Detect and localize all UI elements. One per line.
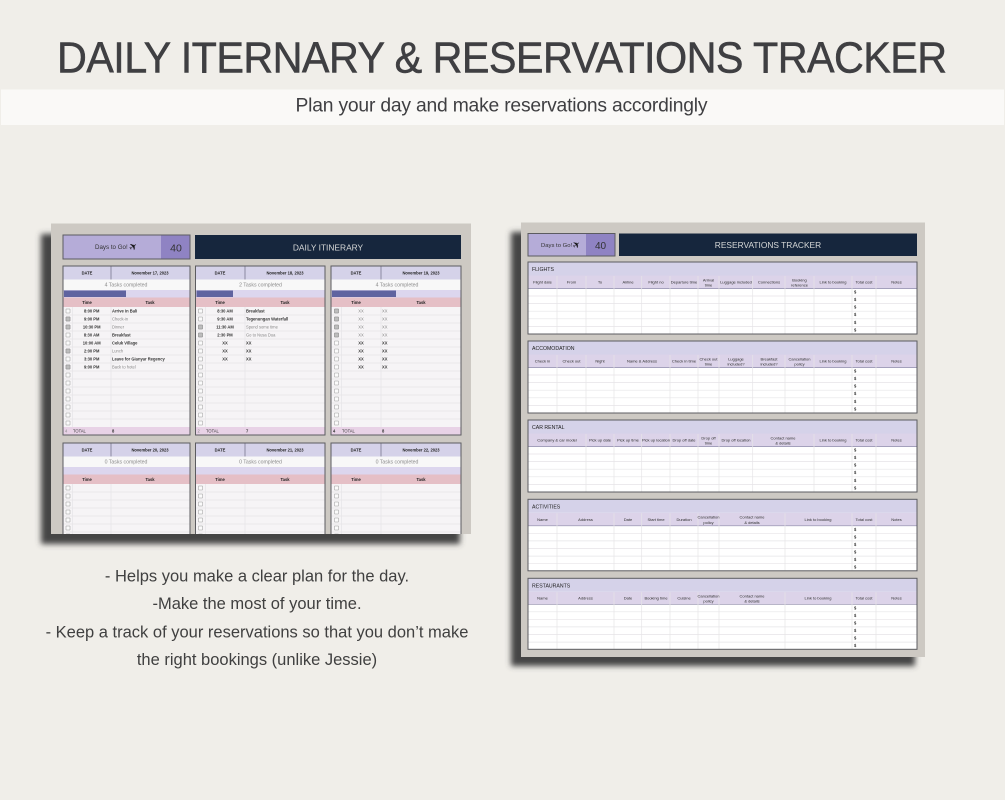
section: flights: $ <box>854 305 857 310</box>
section: flights <box>528 262 917 334</box>
section: accomodation: Total cost <box>856 358 873 364</box>
section: accomodation: Link to booking <box>820 358 846 364</box>
card: November 17: DATE <box>82 270 93 276</box>
section: car rental: Drop off date <box>672 438 696 442</box>
card: November 18: 7 <box>246 428 249 434</box>
section: restaurants <box>528 578 917 649</box>
section: car rental: Pick up location <box>642 438 670 442</box>
card: November 17: November 17, 2023 <box>131 270 169 276</box>
panel: reservations tracker sheet <box>511 222 925 666</box>
section: activities: Link to booking <box>805 517 831 522</box>
section: activities: Notes <box>891 517 902 522</box>
section: accomodation: included? <box>727 362 745 366</box>
section: car rental: Drop off <box>701 435 716 440</box>
card: November 22: November 22, 2023 <box>402 448 440 452</box>
subtitle band <box>1 90 1004 125</box>
section: accomodation: Notes <box>891 358 902 364</box>
section: activities: $ <box>854 534 857 539</box>
section: car rental: Notes <box>891 438 902 442</box>
section: flights: Notes <box>891 280 902 284</box>
card: November 17: 2:00 PM <box>84 348 100 353</box>
card: November 17: Lunch <box>112 348 124 353</box>
card: November 19: XX <box>358 356 364 361</box>
section: flights: From <box>567 280 577 284</box>
section: accomodation: Luggage <box>728 356 745 361</box>
card: November 22 <box>331 443 461 543</box>
subtitle band: Plan your day and make reservations accordingly <box>296 96 708 116</box>
card: November 18: 2 <box>198 428 200 434</box>
section: car rental: Drop off location <box>721 438 751 442</box>
section: activities: Name <box>537 517 549 522</box>
card: November 21: Task <box>280 477 290 482</box>
section: accomodation: $ <box>854 406 857 411</box>
section: flights: Link to booking <box>820 280 846 284</box>
card: November 18: DATE <box>215 270 226 276</box>
section: accomodation: Name & Address <box>627 358 657 364</box>
section: flights: $ <box>854 320 857 325</box>
card: November 19: XX <box>382 364 388 369</box>
section: accomodation: Check in <box>535 358 550 364</box>
section: flights: $ <box>854 327 857 332</box>
section: car rental: Total cost <box>856 438 873 442</box>
card: November 18: XX <box>222 340 228 345</box>
days to go box: 40 <box>170 242 182 254</box>
text block: benefits: - Helps you make a clear plan for the day. <box>105 568 409 586</box>
section: activities: Date <box>624 517 633 522</box>
section: activities: policy <box>703 520 714 525</box>
card: November 19: Task <box>416 300 426 305</box>
section: flights: $ <box>854 290 857 294</box>
section: restaurants: & details <box>744 598 760 603</box>
section: activities: Start time <box>647 517 665 522</box>
daily itinerary heading <box>195 235 461 259</box>
card: November 21: Time <box>215 477 225 482</box>
section: accomodation: time <box>705 362 713 366</box>
section: car rental: Link to booking <box>820 438 846 442</box>
card: November 18: XX <box>246 340 252 345</box>
section: accomodation: Cancellation <box>788 356 811 361</box>
card: November 17: Arrive in Bali <box>112 308 137 313</box>
section: activities: $ <box>854 542 857 547</box>
card: November 20: DATE <box>82 448 93 452</box>
card: November 18: 2:30 PM <box>217 332 233 337</box>
card: November 17: TOTAL <box>73 428 87 434</box>
card: November 21: DATE <box>215 448 226 452</box>
days to go box <box>63 235 190 259</box>
card: November 22: DATE <box>351 448 362 452</box>
section: car rental: $ <box>854 448 857 452</box>
title: DAILY ITERNARY & RESERVATIONS TRACKER <box>57 33 947 83</box>
card: November 18: Task <box>280 300 290 305</box>
card: November 18: XX <box>246 356 252 361</box>
section: flights: $ <box>854 312 857 317</box>
card: November 19: XX <box>382 332 388 337</box>
section: activities: Cancellation <box>697 515 720 520</box>
days to go box: 40 <box>595 241 606 252</box>
card: November 20 <box>63 443 190 543</box>
card: November 19: 4 Tasks completed <box>376 282 419 288</box>
section: restaurants: $ <box>854 605 857 610</box>
card: November 17: Check-in <box>112 316 129 321</box>
card: November 19: XX <box>382 340 388 345</box>
section: car rental: Contact name <box>771 435 796 440</box>
days to go box <box>528 234 615 256</box>
card: November 18: Breakfast <box>246 308 265 313</box>
section: activities: & details <box>744 520 760 525</box>
card: November 18 <box>196 266 325 435</box>
text block: benefits: -Make the most of your time. <box>152 595 362 613</box>
sheet contents <box>521 222 925 657</box>
section: accomodation: included? <box>760 362 778 366</box>
sheet contents <box>51 224 471 543</box>
section: accomodation: $ <box>854 368 857 374</box>
section: car rental: $ <box>854 470 857 475</box>
card: November 18: XX <box>222 348 228 353</box>
card: November 19: November 19, 2023 <box>402 270 440 276</box>
reservations tracker heading <box>619 234 917 256</box>
section: accomodation: Check in time <box>672 358 697 364</box>
card: November 17: Dinner <box>112 324 125 329</box>
card: November 18: November 18, 2023 <box>266 270 304 276</box>
section: restaurants: policy <box>703 598 714 603</box>
section: flights: reference <box>791 282 809 288</box>
section: car rental: $ <box>854 463 857 468</box>
section: flights: Flight no <box>648 280 664 284</box>
section: activities: Contact name <box>740 515 765 520</box>
card: November 19: XX <box>358 316 364 321</box>
section: activities: Address <box>578 517 593 522</box>
card: November 19: DATE <box>351 270 362 276</box>
card: November 17: 10:00 AM <box>83 340 101 345</box>
card: November 22: 0 Tasks completed <box>376 460 419 466</box>
section: flights: Booking <box>792 277 807 282</box>
card: November 17: 9:00 PM <box>84 316 100 321</box>
section: restaurants: Cancellation <box>697 593 720 598</box>
card: November 18: Tegenungan Waterfall <box>246 316 288 321</box>
section: restaurants: Total cost <box>856 595 873 600</box>
section: accomodation: $ <box>854 391 857 396</box>
section: restaurants: $ <box>854 643 857 648</box>
card: November 19: XX <box>358 324 364 329</box>
sheet shadow <box>41 234 460 544</box>
card: November 18: XX <box>246 348 252 353</box>
card: November 18: 8:30 AM <box>217 308 233 313</box>
section: activities: $ <box>854 565 857 570</box>
section: restaurants: Address <box>578 595 593 600</box>
section: flights: Arrival <box>703 277 714 282</box>
card: November 17: Breakfast <box>112 332 131 337</box>
section: car rental: time <box>705 440 713 446</box>
section: restaurants: $ <box>854 628 857 633</box>
card: November 20: Task <box>145 477 155 482</box>
card: November 19: XX <box>358 340 364 345</box>
section: activities: $ <box>854 549 857 554</box>
section: restaurants: Contact name <box>740 593 765 598</box>
card: November 22: Task <box>416 477 426 482</box>
section: accomodation: ACCOMODATION <box>532 346 575 352</box>
days to go box: ✈ <box>570 239 583 252</box>
card: November 21 <box>196 443 325 543</box>
section: flights: Departure time <box>671 280 698 284</box>
card: November 19: XX <box>382 308 388 313</box>
card: November 18: 9:30 AM <box>217 316 233 321</box>
card: November 19: XX <box>358 308 364 313</box>
days to go box: Days to Go! <box>95 244 128 251</box>
card: November 17: Task <box>145 300 155 305</box>
section: accomodation: $ <box>854 376 857 381</box>
card: November 19: 8 <box>382 428 385 434</box>
text block: benefits <box>46 568 468 669</box>
section: activities <box>528 499 917 571</box>
section: restaurants: $ <box>854 613 857 618</box>
section: car rental: $ <box>854 478 857 483</box>
section: activities: Duration <box>676 517 692 522</box>
card: November 18: XX <box>222 356 228 361</box>
card: November 19: XX <box>382 316 388 321</box>
card: November 17: 8:00 PM <box>84 308 100 313</box>
section: accomodation: Night <box>595 358 606 364</box>
section: restaurants: Notes <box>891 595 902 600</box>
card: November 19: 4 <box>333 428 336 434</box>
text block: benefits: the right bookings (unlike Jessie) <box>137 651 377 669</box>
section: activities: Total cost <box>856 517 873 522</box>
card: November 17: Back to hotel <box>112 364 136 369</box>
card: November 17: Celuk Village <box>112 340 138 345</box>
card: November 18: Time <box>215 300 225 305</box>
card: November 19: XX <box>382 356 388 361</box>
section: accomodation: Check out <box>562 358 581 364</box>
card: November 18: 2 Tasks completed <box>239 282 282 288</box>
section: activities: $ <box>854 527 857 532</box>
section: car rental: Pick up time <box>617 438 640 442</box>
panel: daily itinerary sheet <box>41 224 471 544</box>
card: November 19: XX <box>358 348 364 353</box>
card: November 19 <box>331 266 461 435</box>
section: accomodation: $ <box>854 399 857 404</box>
card: November 17: 8 <box>112 428 115 434</box>
card: November 20: November 20, 2023 <box>131 448 169 452</box>
section: car rental: Company & car model <box>537 438 577 442</box>
section: restaurants: RESTAURANTS <box>532 583 571 589</box>
card: November 19: Time <box>351 300 361 305</box>
card: November 18: TOTAL <box>206 428 220 434</box>
card: November 17: 8:30 AM <box>84 332 100 337</box>
section: accomodation <box>528 341 917 413</box>
section: accomodation: Check out <box>699 356 718 361</box>
card: November 17: 4 <box>65 428 68 434</box>
card: November 19: XX <box>358 332 364 337</box>
section: flights: time <box>705 282 713 288</box>
card: November 17: 3:30 PM <box>84 356 100 361</box>
section: car rental: $ <box>854 485 857 490</box>
section: restaurants: Link to booking <box>805 595 831 600</box>
card: November 19: XX <box>382 324 388 329</box>
card: November 17: 4 Tasks completed <box>105 282 148 288</box>
card: November 19: TOTAL <box>342 428 356 434</box>
card: November 18: Spend some time <box>246 324 279 329</box>
section: restaurants: $ <box>854 620 857 625</box>
section: car rental: & details <box>775 440 791 446</box>
card: November 21: 0 Tasks completed <box>239 460 282 466</box>
section: restaurants: Cuisine <box>677 595 691 600</box>
reservations tracker heading: RESERVATIONS TRACKER <box>715 240 821 250</box>
card: November 19: XX <box>382 348 388 353</box>
section: flights: Total cost <box>856 280 873 284</box>
section: flights: $ <box>854 297 857 302</box>
section: flights: Connections <box>758 280 780 284</box>
days to go box: Days to Go! <box>541 243 572 249</box>
card: November 18: Go to Nusa Dua <box>246 332 276 337</box>
section: car rental: Pick up date <box>589 438 612 442</box>
card: November 20: 0 Tasks completed <box>105 460 148 466</box>
section: flights: Luggage included <box>720 280 752 284</box>
section: restaurants: Booking time <box>644 595 668 600</box>
card: November 17: 9:00 PM <box>84 364 100 369</box>
section: activities: $ <box>854 557 857 562</box>
card: November 20: Time <box>82 477 92 482</box>
section: accomodation: Breakfast <box>761 356 778 361</box>
card: November 22: Time <box>351 477 361 482</box>
section: restaurants: Name <box>537 595 549 600</box>
card: November 19: XX <box>358 364 364 369</box>
card: November 21: November 21, 2023 <box>266 448 304 452</box>
card: November 17: Leave for Gianyar Regency <box>112 356 166 361</box>
days to go box: ✈ <box>127 240 140 254</box>
section: activities: ACTIVITIES <box>532 504 561 510</box>
section: accomodation: policy <box>794 362 805 366</box>
sheet shadow <box>511 232 915 666</box>
daily itinerary heading: DAILY ITINERARY <box>293 242 364 252</box>
section: car rental <box>528 420 917 492</box>
section: car rental: $ <box>854 455 857 460</box>
card: November 17 <box>63 266 190 435</box>
card: November 17: 10:30 PM <box>83 324 101 329</box>
section: flights: Airline <box>622 280 634 284</box>
card: November 18: 11:30 AM <box>216 324 234 329</box>
section: flights: FLIGHTS <box>532 267 554 273</box>
card: November 17: Time <box>82 300 92 305</box>
section: restaurants: Date <box>624 595 633 600</box>
section: flights: Flight date <box>533 280 553 284</box>
section: accomodation: $ <box>854 384 857 389</box>
section: restaurants: $ <box>854 636 857 641</box>
section: car rental: CAR RENTAL <box>532 425 565 431</box>
text block: benefits: - Keep a track of your reservations so that you don’t make <box>46 623 468 641</box>
section: flights: To <box>598 280 603 284</box>
